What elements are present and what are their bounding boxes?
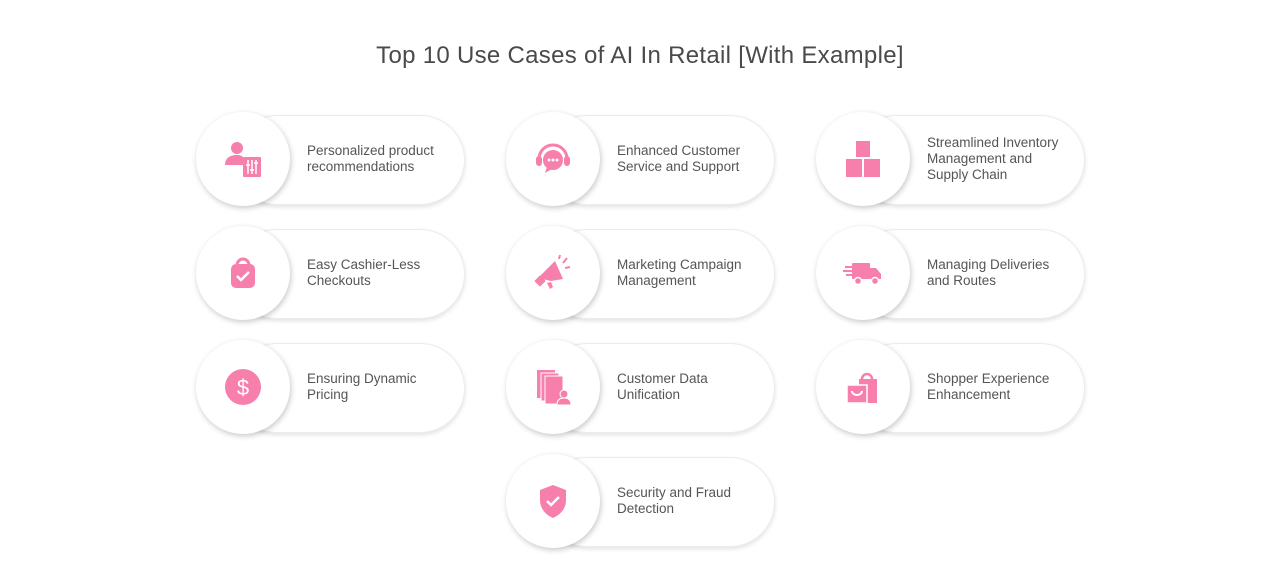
text: Easy Cashier-Less Checkouts — [307, 257, 420, 288]
icon: megaphone — [506, 226, 600, 320]
icon: bag with check — [196, 226, 290, 320]
icon: boxes — [816, 112, 910, 206]
text: Streamlined Inventory Management and Supply Chain — [927, 135, 1058, 182]
card: enhanced customer service — [504, 112, 776, 210]
card: security and fraud detection — [504, 454, 776, 552]
text: Enhanced Customer Service and Support — [617, 143, 740, 174]
icon: person with sliders — [196, 112, 290, 206]
icon: shield with check — [506, 454, 600, 548]
text: Ensuring Dynamic Pricing — [307, 371, 417, 402]
card: personalized product recommendations — [194, 112, 466, 210]
card: streamlined inventory — [814, 112, 1086, 210]
text: Security and Fraud Detection — [617, 485, 731, 516]
icon: delivery truck — [816, 226, 910, 320]
title: Top 10 Use Cases of AI In Retail [With Example] — [376, 42, 904, 69]
card: customer data unification — [504, 340, 776, 438]
card: deliveries and routes — [814, 226, 1086, 324]
card: shopper experience — [814, 340, 1086, 438]
icon: shopping bags — [816, 340, 910, 434]
text: Managing Deliveries and Routes — [927, 257, 1049, 288]
text: Marketing Campaign Management — [617, 257, 742, 288]
icon: dollar coin: $ — [237, 375, 249, 400]
icon: dollar coin — [196, 340, 290, 434]
card: dynamic pricing — [194, 340, 466, 438]
card: cashier-less checkouts — [194, 226, 466, 324]
icon: documents with user — [506, 340, 600, 434]
text: Shopper Experience Enhancement — [927, 371, 1049, 402]
text: Personalized product recommendations — [307, 143, 434, 174]
icon: headset chat — [506, 112, 600, 206]
card: marketing campaign — [504, 226, 776, 324]
text: Customer Data Unification — [617, 371, 708, 402]
